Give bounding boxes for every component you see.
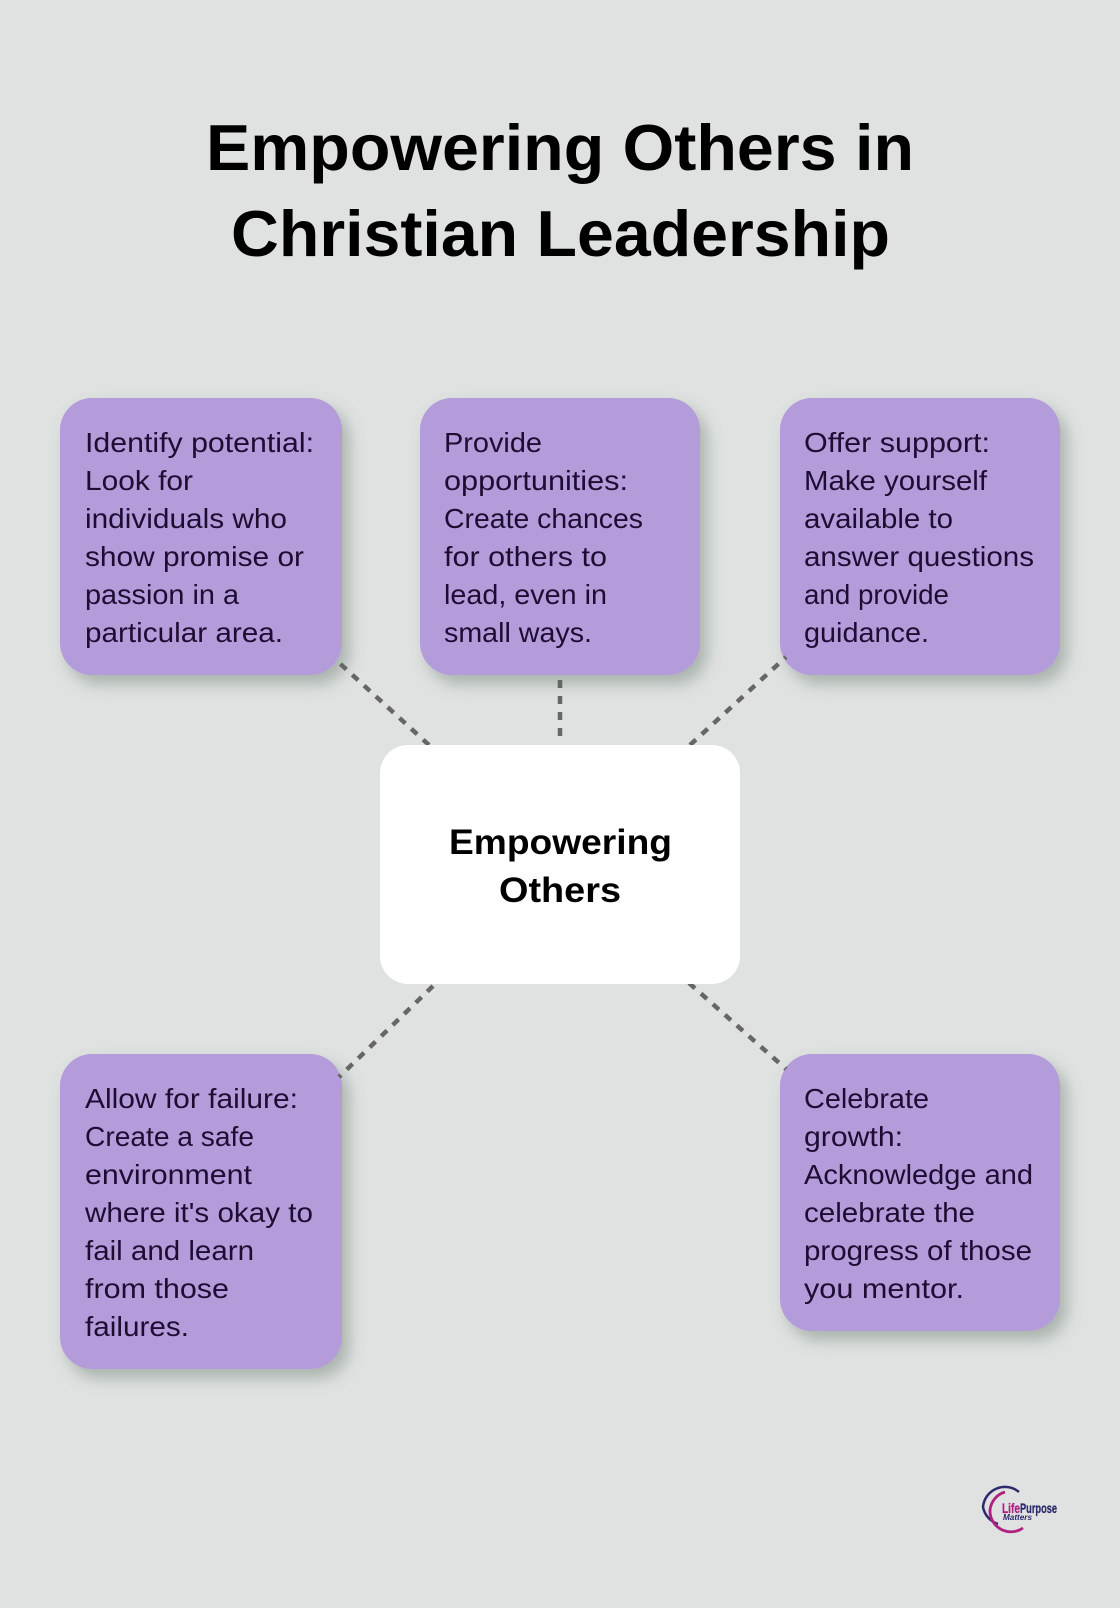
panel: provide opportunities: small ways. [444, 617, 592, 648]
panel: offer support: and provide [804, 579, 949, 610]
title [206, 111, 914, 270]
panel: offer support: Offer support: [804, 427, 990, 458]
icon: life purpose matters logo: Life [1002, 1500, 1020, 1516]
panel: allow for failure: environment [85, 1159, 252, 1190]
connector: offer support to center [690, 657, 786, 745]
panel: center empowering others: Empowering [449, 823, 672, 862]
panel: provide opportunities: for others to [444, 541, 607, 572]
panel: allow for failure: Create a safe [85, 1121, 254, 1152]
panel: celebrate growth: Acknowledge and [804, 1159, 1033, 1190]
panel: offer support [780, 398, 1060, 675]
panel: provide opportunities: Create chances [444, 503, 643, 534]
panel: provide opportunities [420, 398, 700, 675]
connector: identify potential to center [335, 659, 429, 745]
title: Empowering Others in [206, 111, 914, 184]
panel: offer support: Make yourself [804, 465, 987, 496]
connector: celebrate growth to center [689, 983, 786, 1069]
panel: identify potential: Identify potential: [85, 427, 314, 458]
panel: provide opportunities: opportunities: [444, 465, 628, 496]
panel: identify potential [60, 398, 342, 675]
panel: celebrate growth [780, 1054, 1060, 1331]
panel: identify potential: particular area. [85, 617, 283, 648]
panel: identify potential: show promise or [85, 541, 304, 572]
icon: life purpose matters logo [983, 1487, 1057, 1532]
panel: identify potential: Look for [85, 465, 193, 496]
panel: allow for failure: Allow for failure: [85, 1083, 298, 1114]
panel: identify potential: individuals who [85, 503, 287, 534]
panel: offer support: available to [804, 503, 953, 534]
panel: identify potential: passion in a [85, 579, 239, 610]
panel: allow for failure: failures. [85, 1311, 189, 1342]
title: Christian Leadership [231, 197, 890, 270]
panel: center empowering others [380, 745, 740, 984]
icon: life purpose matters logo: Matters [1003, 1513, 1033, 1522]
panel: allow for failure [60, 1054, 342, 1369]
panel: center empowering others: Others [499, 871, 621, 910]
panel: celebrate growth: celebrate the [804, 1197, 975, 1228]
icon: life purpose matters logo: Purpose [1020, 1500, 1057, 1516]
panel: offer support: guidance. [804, 617, 929, 648]
panel: allow for failure: where it's okay to [84, 1197, 313, 1228]
panel: celebrate growth: growth: [804, 1121, 903, 1152]
connector: allow for failure to center [339, 986, 433, 1077]
panel: provide opportunities: lead, even in [444, 579, 607, 610]
panel: celebrate growth: you mentor. [804, 1273, 964, 1304]
panel: provide opportunities: Provide [444, 427, 542, 458]
panel: offer support: answer questions [804, 541, 1034, 572]
panel: celebrate growth: progress of those [804, 1235, 1032, 1266]
connector: provide opportunities to center [558, 680, 562, 744]
panel: allow for failure: fail and learn [85, 1235, 254, 1266]
panel: allow for failure: from those [85, 1273, 229, 1304]
panel: celebrate growth: Celebrate [804, 1083, 929, 1114]
